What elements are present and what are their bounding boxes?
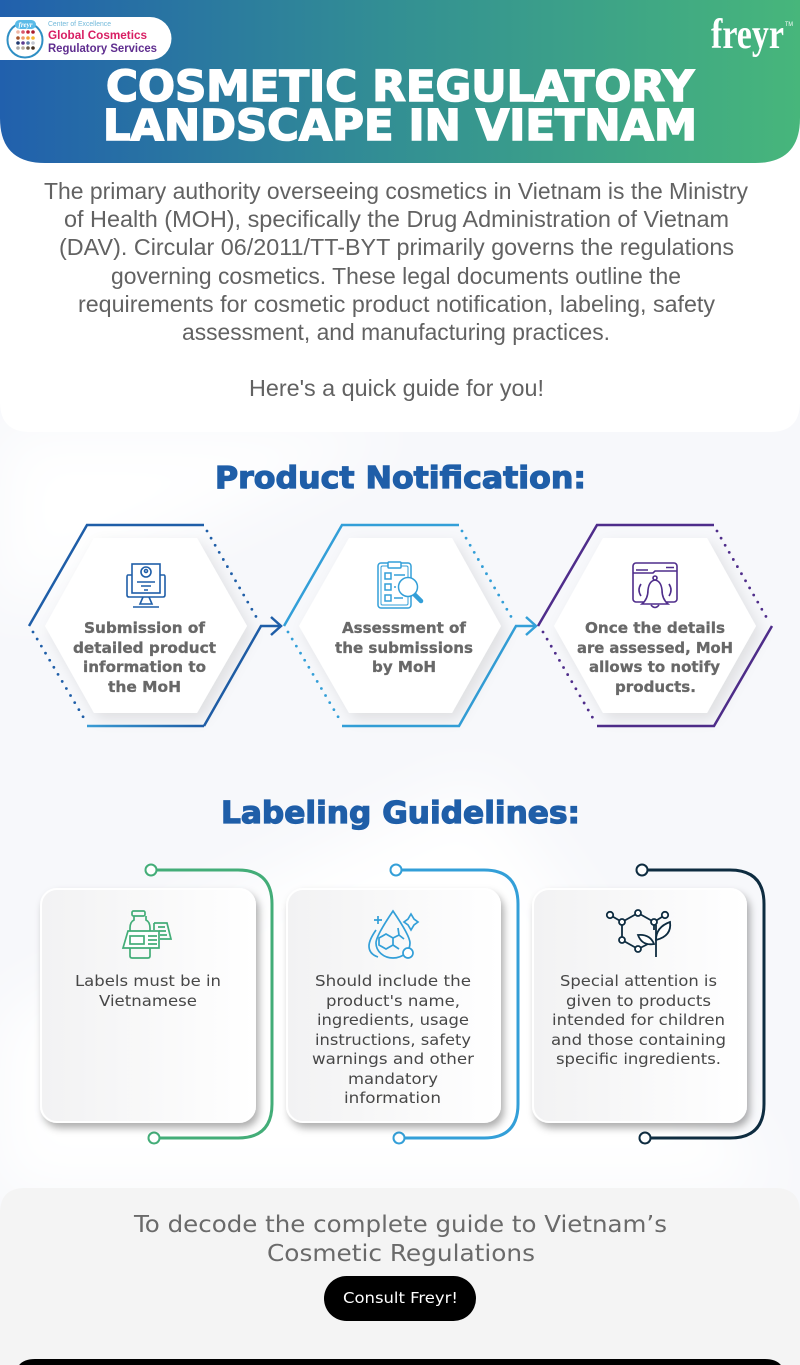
step 1 text (73, 619, 217, 696)
connector line 1 (146, 864, 272, 1144)
hexagon outline 3 (538, 525, 772, 726)
logo: Global Cosmetics badge (0, 17, 171, 60)
step 2 text: by MoH (372, 658, 436, 676)
card 1 text: Vietnamese (99, 992, 197, 1010)
card 3 text: and those containing (551, 1031, 726, 1049)
icon: molecule with plant (607, 910, 670, 957)
intro text block: requirements for cosmetic product notification, labeling, safety (78, 291, 715, 317)
card 3 text (551, 972, 726, 1068)
card 2 text: information (344, 1089, 441, 1107)
heading: Product Notification: Product Notification: (215, 461, 586, 496)
header banner (0, 0, 800, 163)
card 1 text: Labels must be in (75, 972, 221, 990)
step 3 text (577, 619, 733, 696)
connector line 2 (390, 864, 518, 1144)
step 3 text: allows to notify (589, 658, 720, 676)
intro text block (44, 178, 748, 401)
icon: clipboard with magnifier (378, 562, 421, 608)
intro text block: governing cosmetics. These legal documents outline the (111, 263, 681, 289)
intro text block: The primary authority overseeing cosmetics in Vietnam is the Ministry (44, 178, 748, 204)
panel: introduction (0, 140, 800, 432)
icon: document on monitor (127, 564, 165, 607)
button: Consult Freyr (324, 1276, 476, 1321)
card 2 text (312, 972, 475, 1107)
button: Consult Freyr: Consult Freyr! (343, 1289, 458, 1307)
call to action text: To decode the complete guide to Vietnam’s (133, 1212, 667, 1238)
step 1 text: the MoH (108, 678, 181, 696)
title: COSMETIC REGULATORY (106, 62, 695, 112)
panel: step 1 submission (29, 525, 281, 726)
intro text block: Here's a quick guide for you! (249, 375, 544, 401)
panel: card 3 special attention (533, 864, 764, 1144)
logo: freyr: freyr (711, 12, 784, 58)
logo: Global Cosmetics badge: freyr (18, 21, 33, 29)
step 2 text: the submissions (335, 639, 473, 657)
call to action text (133, 1212, 667, 1267)
hexagon outline 1 (29, 525, 281, 726)
step 3 text: Once the details (585, 619, 725, 637)
card 2 text: ingredients, usage (317, 1011, 469, 1029)
card 2 text: instructions, safety (315, 1031, 471, 1049)
card 3 text: given to products (566, 992, 711, 1010)
icon: bottle with labels (123, 911, 171, 958)
panel: card 2 content (287, 864, 518, 1144)
panel: call to action (0, 1188, 800, 1365)
logo: freyr: TM (785, 22, 793, 28)
icon: browser with bell (633, 563, 677, 608)
call to action text: Cosmetic Regulations (267, 1241, 535, 1267)
card 3 text: specific ingredients. (556, 1050, 721, 1068)
intro text block: (DAV). Circular 06/2011/TT-BYT primarily governs the regulations (59, 234, 734, 260)
step 3 text: are assessed, MoH (577, 639, 733, 657)
step 3 text: products. (615, 678, 696, 696)
intro text block: assessment, and manufacturing practices. (182, 319, 610, 345)
card 2 text: product's name, (326, 992, 460, 1010)
title: LANDSCAPE IN VIETNAM (103, 101, 697, 151)
step 1 text: Submission of (84, 619, 205, 637)
intro text block: of Health (MOH), specifically the Drug Administration of Vietnam (64, 206, 729, 232)
card 2 text: warnings and other (312, 1050, 475, 1068)
connector line 3 (636, 864, 764, 1144)
title (103, 62, 697, 151)
panel: step 3 notify (538, 525, 772, 726)
footer bar (15, 1359, 785, 1365)
step 2 text (335, 619, 473, 676)
logo: Global Cosmetics badge: Center of Excellence (48, 19, 111, 28)
icon: droplet with molecule (369, 911, 418, 958)
card 1 text (75, 972, 221, 1010)
heading: Labeling Guidelines: Labeling Guidelines: (221, 796, 580, 831)
step 2 text: Assessment of (342, 619, 466, 637)
step 1 text: detailed product (73, 639, 217, 657)
panel: card 1 language (41, 864, 272, 1144)
panel: step 2 assessment (284, 525, 536, 726)
card 3 text: intended for children (552, 1011, 725, 1029)
logo: Global Cosmetics badge: Global Cosmetics (48, 30, 147, 42)
card 2 text: Should include the (315, 972, 471, 990)
hexagon outline 2 (284, 525, 536, 726)
card 2 text: mandatory (348, 1070, 438, 1088)
card 3 text: Special attention is (560, 972, 717, 990)
logo: Global Cosmetics badge: Regulatory Services (48, 43, 157, 55)
step 1 text: information to (83, 658, 206, 676)
